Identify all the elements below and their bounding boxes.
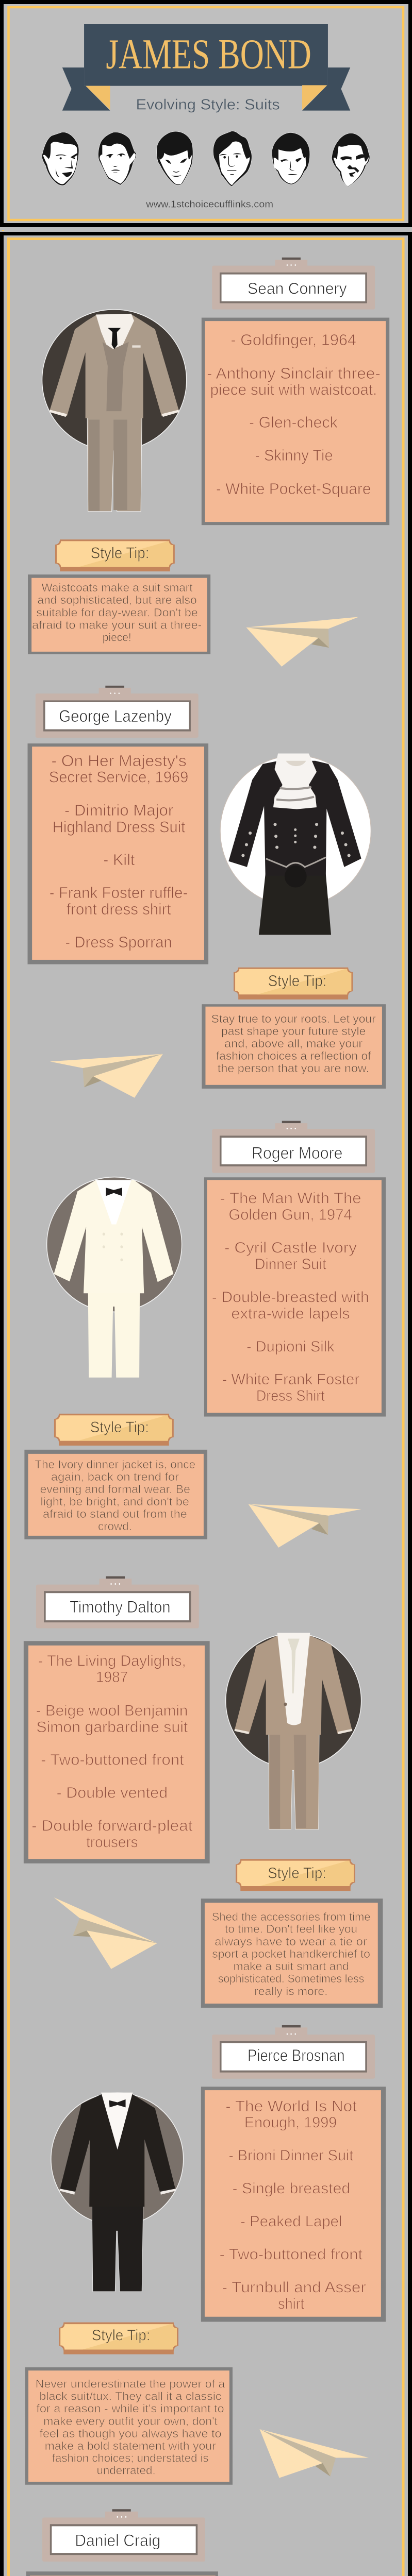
suit illustration [42,310,187,512]
details box: - Anthony Sinclair three- [207,365,381,382]
details box: - Peaked Lapel [240,2212,342,2230]
icon: face Brosnan [272,132,310,184]
style tip text: to time. Don't feel like you [225,1923,357,1936]
style tip plaque [54,1414,174,1446]
details box: - Double forward-pleat [31,1817,193,1834]
name plate [36,686,199,738]
title banner [62,24,350,111]
name plate: Sean Connery [248,279,347,298]
details box: - Glen-check [249,414,338,431]
details box: - Double-breasted with [212,1288,369,1306]
subtitle: Evolving Style: Suits [136,96,280,113]
details box: - Cyril Castle Ivory [224,1239,357,1256]
style tip text: Stay true to your roots. Let your [211,1012,376,1025]
icon: face Connery [42,132,79,185]
style tip text: fashion choices; understated is [52,2452,209,2465]
style tip text: always have to wear a tie or [215,1936,367,1948]
style tip text: The Ivory dinner jacket is, once [35,1459,195,1471]
icon: paper plane [249,1504,361,1548]
style tip text: and sophisticated, but are also [37,595,197,606]
details box: Secret Service, 1969 [49,769,188,786]
style tip text: really is more. [254,1985,327,1998]
details box: - On Her Majesty's [51,753,187,770]
name plate [212,1121,375,1173]
faces row left [42,131,193,185]
website url: www.1stchoicecufflinks.com [145,199,273,210]
style tip plaque: Style Tip: [268,973,326,990]
details box [24,1641,210,1863]
name plate [42,2509,205,2562]
details box: Highland Dress Suit [53,819,186,836]
icon: paper plane [50,1054,163,1098]
style tip text [24,1450,207,1539]
section: Daniel Craig [26,2509,393,2576]
style tip plaque: Style Tip: [268,1864,326,1882]
details box: 1987 [96,1668,128,1685]
details box: - White Pocket-Square [216,481,371,498]
style tip text: make every outfit your own, don't [43,2415,218,2428]
name plate: Pierce Brosnan [248,2046,345,2065]
style tip text: make a suit smart and [233,1960,349,1973]
style tip text: afraid to stand out from the [43,1508,187,1520]
details box: - Dimitrio Major [64,802,173,819]
name plate: Roger Moore [252,1144,342,1162]
style tip text: Shed the accessories from time [212,1911,370,1923]
style tip text: piece! [103,632,131,644]
section: Timothy Dalton [24,1577,383,2008]
style tip text: evening and formal wear. Be [40,1483,190,1496]
details box [202,318,389,525]
beige suit illustration [226,1633,361,1829]
section: Roger Moore [24,1121,386,1548]
details box [28,743,208,964]
details box: piece suit with waistcoat. [210,381,377,399]
details box: - Two-buttoned front [41,1751,184,1768]
details box: - Dress Sporran [65,934,172,951]
details box: - The Man With The [220,1189,361,1207]
details box: - Goldfinger, 1964 [230,332,356,349]
details box: - The World Is Not [225,2097,357,2114]
details box: Dinner Suit [255,1255,326,1273]
ivory suit illustration [47,1177,182,1378]
details box: - Turnbull and Asser [222,2278,366,2296]
name plate [212,2025,375,2079]
icon: face Craig [332,133,370,187]
style tip text: afraid to make your suit a three- [32,619,202,632]
name plate: Timothy Dalton [70,1598,171,1617]
style tip plaque [59,2323,178,2354]
icon: face Lazenby [98,132,137,185]
details box: Dress Shirt [256,1387,325,1404]
style tip text: and, above all, make your [224,1037,362,1050]
style tip plaque: Style Tip: [92,2326,150,2344]
tuxedo illustration [51,2093,184,2292]
details box: - Two-buttoned front [219,2245,362,2263]
icon: face Dalton [213,131,252,187]
style tip text [202,1004,386,1089]
style tip text: sophisticated. Sometimes less [218,1973,364,1985]
details box: - Kilt [103,852,135,869]
details box [201,2087,386,2322]
style tip text: past shape your future style [221,1025,366,1038]
details box: front dress shirt [67,901,171,918]
style tip plaque [55,539,175,571]
section: Pierce Brosnan [25,2025,386,2485]
details box [26,2571,218,2576]
details box: shirt [278,2295,304,2312]
style tip text: black suit/tux. They call it a classic [39,2391,222,2403]
details box: - The Living Daylights, [38,1652,186,1669]
details box: - Skinny Tie [255,447,333,464]
style tip plaque [234,968,353,999]
style tip text: feel as though you always have to [39,2428,222,2440]
style tip text: crowd. [98,1520,132,1533]
name plate: George Lazenby [59,707,172,725]
style tip text: suitable for day-wear. Don't be [36,607,198,619]
details box: trousers [86,1833,138,1851]
panel: header [4,4,408,223]
icon: paper plane [54,1897,157,1969]
details box: - Frank Foster ruffle- [50,885,188,902]
details box: extra-wide lapels [231,1304,350,1322]
section: George Lazenby [28,686,386,1098]
faces row right [213,131,370,187]
style tip text: Waistcoats make a suit smart [42,582,193,594]
details box: - White Frank Foster [222,1370,359,1387]
details box: Golden Gun, 1974 [228,1206,352,1223]
details box: - Beige wool Benjamin [36,1701,188,1719]
style tip text: fashion choices a reflection of [216,1049,371,1062]
details box: Simon garbardine suit [36,1718,188,1735]
style tip text: make a bold statement with your [45,2440,216,2452]
details box: - Single breasted [232,2179,350,2197]
style tip text: sport a pocket handkerchief to [212,1948,370,1960]
style tip text [201,1899,383,2008]
style tip text [25,2367,233,2485]
style tip text: the person that you are now. [218,1062,369,1075]
kilt outfit illustration [220,753,371,935]
style tip text: underrated. [97,2465,156,2477]
icon: paper plane [246,617,359,667]
style tip text: again, back on trend for [51,1471,179,1483]
details box: - Double vented [57,1784,168,1801]
style tip plaque: Style Tip: [90,1418,149,1435]
name plate [36,1577,199,1629]
name plate: Daniel Craig [75,2532,160,2550]
icon: face Moore [157,131,193,185]
icon: paper plane [259,2429,369,2478]
style tip plaque [236,1859,355,1891]
details box [204,1177,386,1417]
style tip text: Never underestimate the power of a [36,2378,225,2391]
details box: - Brioni Dinner Suit [228,2146,354,2164]
style tip text [28,574,210,654]
style tip text: for a reason - while it's important to [36,2403,224,2415]
name plate [212,258,375,310]
style tip plaque: Style Tip: [91,545,149,562]
style tip text: light, be bright, and don't be [40,1496,189,1508]
details box: Enough, 1999 [244,2113,337,2131]
details box: - Dupioni Silk [246,1337,335,1355]
section: Sean Connery [28,258,389,667]
